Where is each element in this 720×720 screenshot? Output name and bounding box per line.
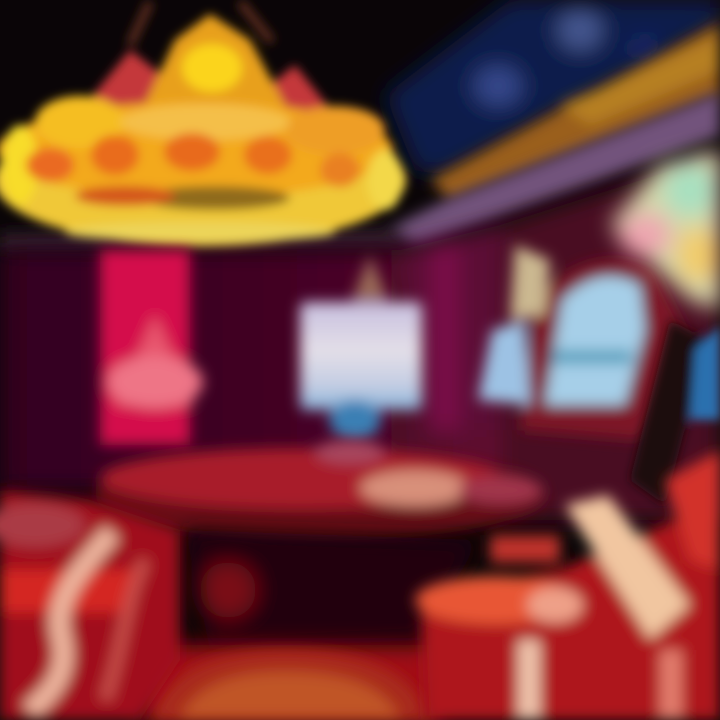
chandelier: glowing lamps — [26, 148, 74, 182]
bottom left: red seat with white streaks — [0, 490, 180, 720]
colourful decoration: top right — [610, 150, 720, 310]
chandelier: cords — [130, 2, 272, 45]
chandelier: top dome — [140, 14, 290, 115]
bottom right: red seats with peach highlights — [415, 450, 720, 720]
banner: red with pyramid — [100, 250, 203, 445]
black slanted post — [630, 320, 720, 505]
chandelier — [0, 2, 406, 246]
floor — [140, 645, 440, 720]
chandelier: main ring — [0, 114, 406, 246]
table: dark base — [185, 530, 480, 650]
chandelier: lower ring shadow — [140, 186, 290, 210]
ceiling: lilac band — [0, 92, 720, 252]
slot screen: center — [300, 255, 422, 440]
ceiling: night sky panel — [385, 0, 720, 175]
wall: maroon curtain — [0, 155, 720, 520]
ceiling: orange band — [430, 22, 720, 200]
slot screen: right with arch — [478, 245, 690, 440]
table: red round top — [95, 440, 545, 541]
bottom center: orange dome stool — [150, 650, 430, 720]
chandelier: side crown pink — [85, 50, 175, 130]
